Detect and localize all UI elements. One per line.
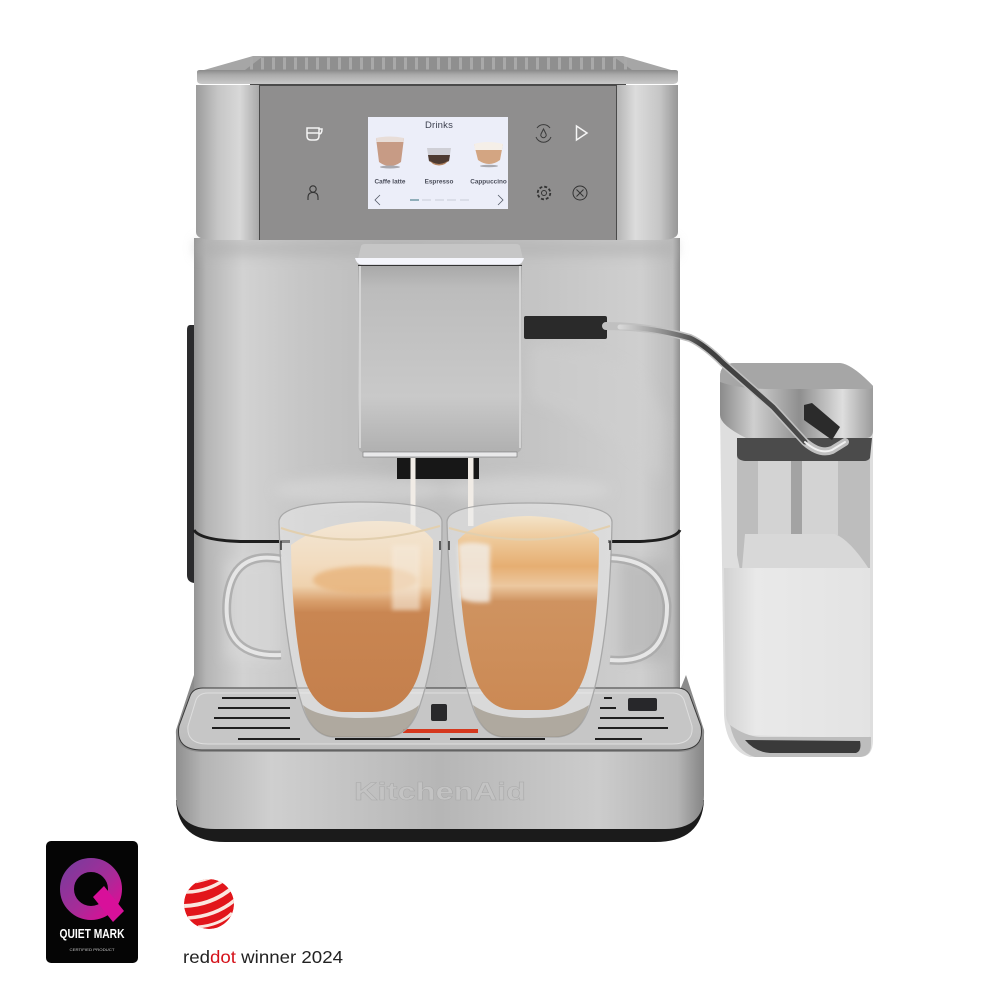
drink thumbnail: espresso — [427, 148, 451, 166]
jug lid dark band — [737, 438, 872, 461]
badge: red dot award — [183, 877, 343, 967]
jug lid top face — [720, 363, 873, 389]
crema patch — [313, 566, 417, 594]
pale vertical reflection — [392, 545, 420, 610]
black nozzle block — [397, 458, 479, 479]
center drain — [431, 704, 447, 721]
drink thumbnail: caffe latte — [376, 136, 404, 168]
icon: descale — [536, 125, 551, 142]
icon: user — [308, 186, 318, 200]
coffee streams — [410, 458, 474, 528]
left glass mug — [227, 502, 442, 737]
touch screen — [368, 117, 508, 209]
icon: cancel — [573, 186, 587, 200]
coffee — [458, 516, 599, 710]
body seam — [194, 530, 680, 542]
pale milk side — [458, 542, 490, 602]
coffee — [291, 521, 433, 712]
tray button right — [628, 698, 657, 711]
left stainless corner — [196, 85, 259, 240]
tray plate inner ring — [188, 693, 692, 744]
upper section backing — [250, 84, 626, 240]
icon: cup — [307, 128, 322, 140]
rim highlight — [449, 526, 610, 540]
embossed brand: KitchenAid — [354, 778, 526, 806]
milk body — [724, 568, 870, 738]
rim highlight — [281, 526, 440, 540]
Q logo — [67, 865, 124, 922]
screen title: Drinks — [425, 120, 453, 131]
tray top sloped edge — [176, 675, 704, 752]
tray front — [176, 730, 704, 829]
award caption: reddot winner 2024 — [183, 947, 343, 967]
certified product label: CERTIFIED PRODUCT — [70, 948, 115, 952]
glass container — [720, 410, 873, 757]
cup reflections on body — [196, 240, 676, 660]
glass — [447, 503, 612, 737]
machine rear side shadow panel — [187, 325, 197, 583]
badge: Quiet Mark — [46, 841, 138, 963]
right stainless corner — [617, 85, 678, 240]
drink labels: Cappuccino — [470, 178, 507, 186]
jug lid — [720, 363, 873, 438]
milk jug — [720, 363, 873, 757]
icon: play — [576, 126, 587, 140]
control panel — [260, 86, 616, 240]
product infographic canvas — [46, 56, 873, 963]
tube connector — [804, 403, 840, 440]
rim marks — [449, 541, 610, 550]
upper clear chamber — [737, 455, 870, 572]
red indicator strip — [403, 729, 478, 733]
coffee machine body — [194, 56, 680, 692]
tray plate — [178, 688, 702, 750]
milk connector socket — [524, 316, 607, 339]
jug glass base — [730, 725, 871, 757]
drink labels: Caffe latte — [375, 178, 406, 186]
coffee spout unit — [355, 244, 524, 528]
drink labels: Espresso — [425, 178, 453, 186]
drink thumbnail: cappuccino — [474, 142, 503, 167]
milk tube — [791, 460, 802, 550]
top lid with drip grille — [197, 56, 678, 84]
handle — [610, 558, 667, 660]
screen navigation arrows and page dots — [375, 195, 503, 205]
rim marks — [281, 541, 440, 550]
glass — [279, 502, 442, 737]
glass base — [303, 705, 419, 737]
glass base — [473, 705, 589, 737]
drink labels — [375, 178, 507, 186]
spout front — [358, 266, 522, 453]
milk surface — [742, 534, 869, 569]
black rubber base — [176, 800, 704, 842]
milk hose — [606, 326, 845, 451]
chrome strip — [363, 452, 517, 457]
right glass mug — [447, 503, 667, 737]
icon: settings — [538, 187, 550, 199]
red dot sphere — [184, 877, 235, 929]
spout cap — [358, 244, 523, 262]
lower stainless body — [194, 238, 680, 692]
Quiet Mark wordmark: QUIET MARK — [60, 927, 124, 941]
tray grille slots — [212, 698, 668, 739]
drip tray — [176, 675, 704, 842]
handle — [227, 558, 281, 655]
